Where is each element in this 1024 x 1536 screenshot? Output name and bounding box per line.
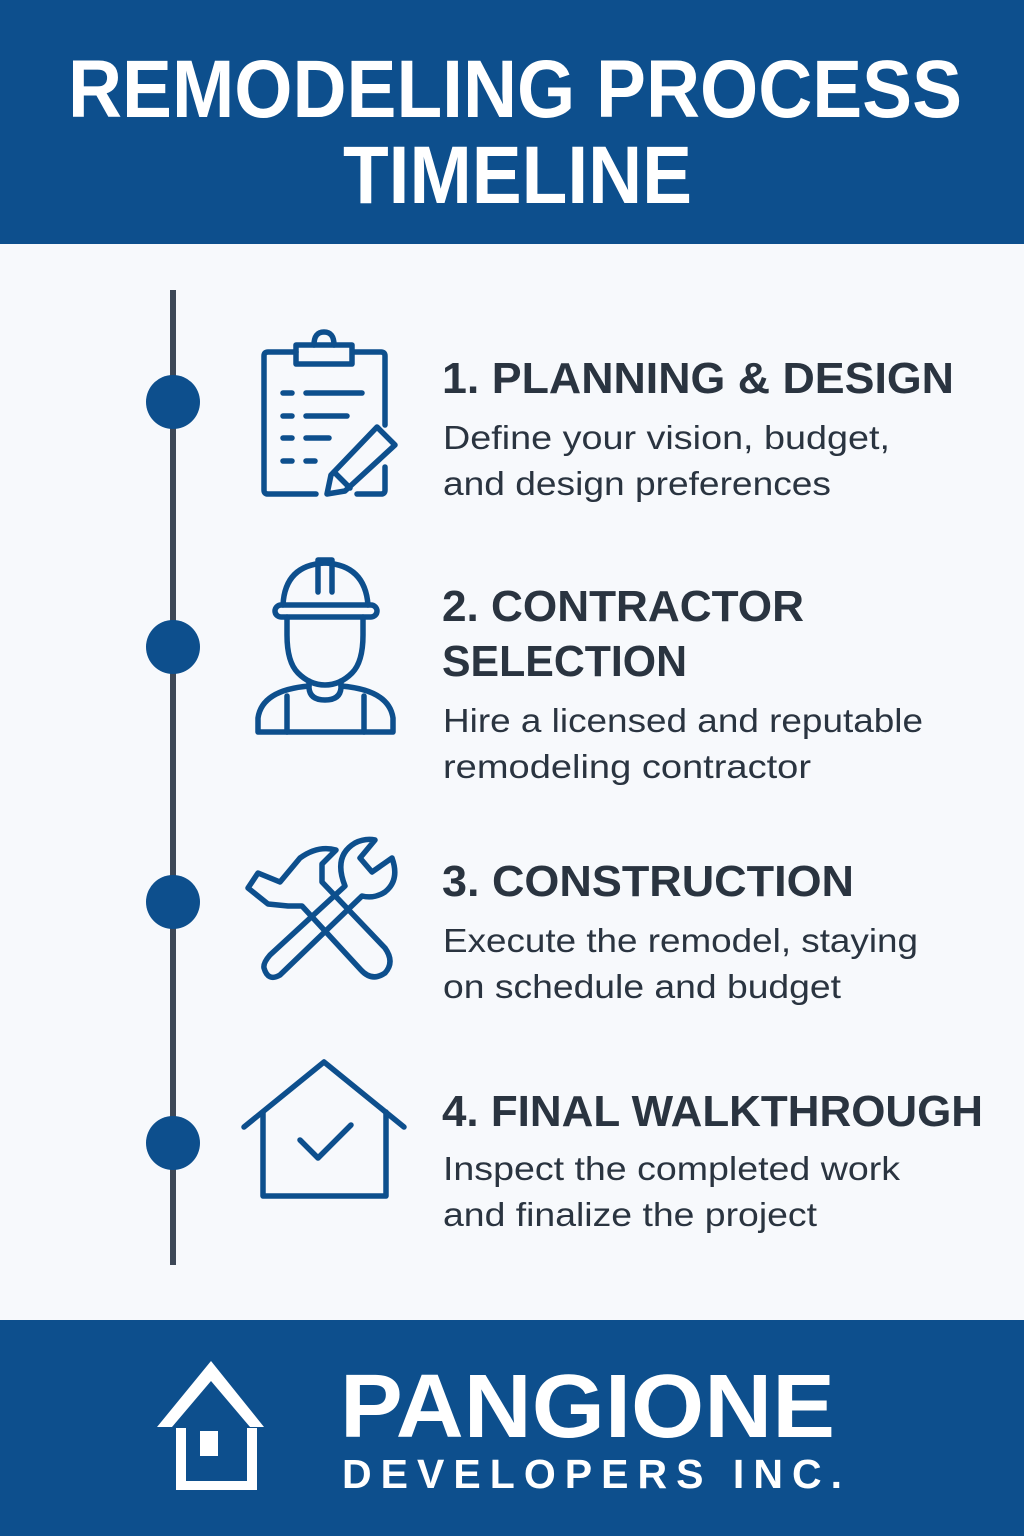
logo text: PANGIONE	[340, 1357, 835, 1457]
step 3 text: 3. CONSTRUCTION	[442, 857, 854, 906]
logo house	[157, 1361, 264, 1490]
step 4 text: and finalize the project	[443, 1196, 817, 1233]
step 2 text: 2. CONTRACTOR	[442, 582, 804, 631]
step 2 text: SELECTION	[442, 637, 687, 686]
icon: hammer and wrench	[248, 839, 395, 977]
logo text: DEVELOPERS INC.	[342, 1451, 842, 1497]
step 1 text: 1. PLANNING & DESIGN	[442, 354, 954, 403]
timeline dots	[146, 375, 200, 1170]
title: TIMELINE	[343, 130, 692, 221]
footer banner	[0, 1320, 1024, 1536]
step 3 text: Execute the remodel, staying	[443, 922, 918, 959]
icon: clipboard	[264, 332, 395, 494]
step 4 text: Inspect the completed work	[443, 1150, 901, 1187]
step 4 text: 4. FINAL WALKTHROUGH	[442, 1087, 983, 1136]
logo text	[340, 1357, 842, 1497]
step 4 text	[442, 1087, 983, 1233]
step 1 text: and design preferences	[443, 465, 831, 502]
step 1 text: Define your vision, budget,	[443, 419, 890, 456]
icon: house with check	[244, 1062, 404, 1196]
icon: contractor	[258, 560, 393, 732]
step 3 text: on schedule and budget	[443, 968, 841, 1005]
header banner	[0, 0, 1024, 244]
title	[68, 44, 962, 221]
step 2 text	[442, 582, 923, 785]
step 2 text: remodeling contractor	[443, 748, 811, 785]
title: REMODELING PROCESS	[68, 44, 962, 135]
step 3 text	[442, 857, 918, 1005]
timeline line	[170, 290, 176, 1265]
step 1 text	[442, 354, 954, 502]
step 2 text: Hire a licensed and reputable	[443, 702, 923, 739]
